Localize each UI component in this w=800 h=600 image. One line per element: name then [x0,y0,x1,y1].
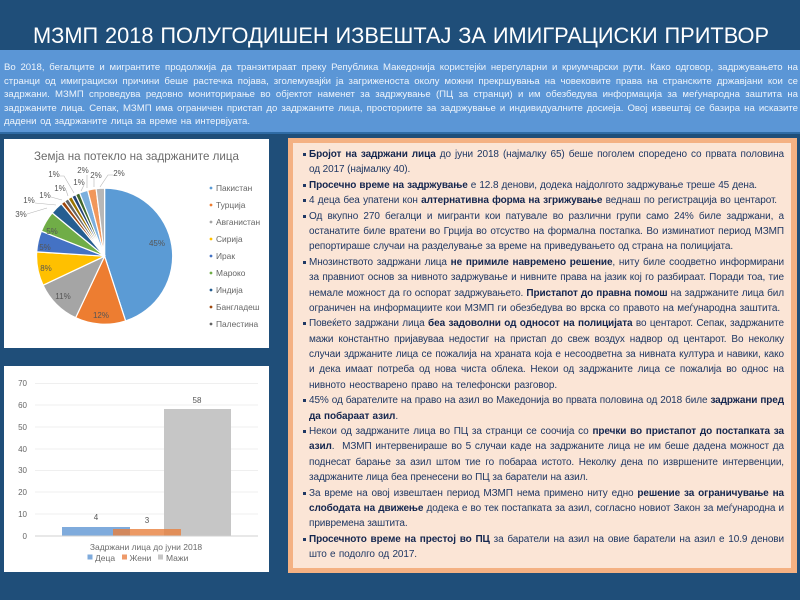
panel: peach background [293,143,791,568]
bar value labels: 4 [94,513,99,522]
finding: average stay in reception centre [293,532,791,563]
pie legend: Бангладеш [216,302,260,312]
pie percentage labels: 1% [73,178,85,187]
bar chart y-axis labels: 0 [23,532,28,541]
pie legend: Сирија [216,234,243,244]
pie percentage labels: 5% [46,227,58,236]
title: МЗМП 2018 ПОЛУГОДИШЕН ИЗВЕШТАЈ ЗА ИМИГРАЦИСКИ ПРИТВОР [33,23,769,48]
finding: 270 refugees and migrants [293,209,791,255]
finding: 45 percent of asylum seekers: 45% од барателите на право на азил во Македонија во првата половина од 2018 биле задржани пред [309,395,784,406]
finding: no timely decision: за правниот основ за нивното задржување и нивните права на јазик кој го разбираат. Поради тоа, тие [309,272,784,283]
intro text panel: задржаните лица. Сепак, МЗМП има ограничен пристап до задржаните лица, просториите за задржување и индивидуалните досиеја. Овој извештај се базира на исказите [4,103,798,114]
pie percentage labels: 1% [39,191,51,200]
pie percentage labels: 45% [149,239,165,248]
finding: relations with police: нивното неостварено право на телефонски разговор. [309,380,557,391]
finding: restriction of movement: слободата на движење додека е во тек постапката за азил, согласно новиот Закон за меѓународна и [309,503,784,514]
pie legend: Ирак [216,251,235,261]
bar legend: Жени [130,553,152,563]
pie percentage labels [15,166,165,320]
finding: obstacles to asylum procedure [293,424,791,486]
bar chart y-axis labels: 60 [18,401,28,410]
bar chart y-axis labels [18,379,28,541]
pie legend: Авганистан [216,217,260,227]
bars [62,409,231,536]
finding: alternative care: 4 деца беа упатени кон алтернативна форма на згрижување веднаш по регистрација во центарот. [309,195,777,206]
pie legend: Пакистан [216,183,253,193]
bar legend: Деца [95,553,115,563]
bar chart y-axis labels: 70 [18,379,28,388]
finding: relations with police: и дека имаат потреба од нова чиста облека. Некои од задржаните лица се пожалија во однос на [309,364,784,375]
pie percentage labels: 1% [23,196,35,205]
bar chart y-axis labels: 20 [18,488,28,497]
finding: obstacles to asylum procedure: азил. МЗМП интервенираше во 5 случаи каде на задржаните лица не им беше дадена можност да [309,441,784,452]
finding: number detained: Бројот на задржани лица до јуни 2018 (најмалку 65) беше поголем споредено со првата половина [309,149,784,160]
finding: restriction of movement [293,486,791,532]
finding: relations with police: случаи здржаните лица се пожалија на храната која е несоодветна за нивната култура и навики, како [309,349,784,360]
pie legend: Мароко [216,268,246,278]
bar chart y-axis labels: 10 [18,510,28,519]
bar chart y-axis labels: 30 [18,466,28,475]
finding: no timely decision [293,255,791,316]
bar chart y-axis labels: 40 [18,445,28,454]
pie percentage labels: 2% [113,169,125,178]
bar value labels: 58 [193,396,202,405]
pie percentage labels: 1% [54,184,66,193]
pie percentage labels: 8% [40,264,52,273]
pie percentage labels: 2% [90,171,102,180]
pie percentage labels: 2% [77,166,89,175]
pie percentage labels: 3% [15,210,27,219]
pie percentage labels: 5% [39,243,51,252]
intro text panel [0,50,800,134]
finding: no timely decision: Мнозинството задржани лица не примиле навремено решение, ниту биле соодветно информирани [309,257,784,268]
bar legend [88,553,189,563]
finding: 270 refugees and migrants: останатите биле вратени во Грција во отсуство на формална постапка. Во изминатиот период МЗМП [309,226,784,237]
axis title: Задржани лица до јуни 2018 [90,542,202,552]
pie percentage labels: 11% [55,292,71,301]
finding: 45 percent of asylum seekers [293,393,791,424]
finding: number detained: од 2017 (најмалку 40). [309,164,410,175]
pie legend [210,183,260,329]
pie leader lines [27,175,113,214]
intro text panel: задржани. МЗМП спроведува редовно мониторирање во објектот наменет за задржување (ПЦ за странци) и им обезбедува информација за меѓународна заштита на [4,89,798,100]
finding: obstacles to asylum procedure: задржаните лица беа пренесени во ПЦ за баратели на азил. [309,472,588,483]
finding: 270 refugees and migrants: репортираше случаи на разделување за време на приведувањето од страна на полицијата. [309,241,733,252]
intro text panel: Во 2018, бегалците и мигрантите продолжија да транзитираат преку Република Македонија користејќи нерегуларни и криумчарски рути. Како одговор, задржувањето на [4,62,798,73]
finding: number detained [293,147,791,178]
finding: obstacles to asylum procedure: Некои од задржаните лица во ПЦ за странци се соочија со пречки во пристапот до постапката за [309,426,784,437]
pie legend: Турција [216,200,246,210]
finding: restriction of movement: За време на овој извештаен период МЗМП нема примено ниту едно решение за ограничување на [309,488,784,499]
pie legend: Палестина [216,319,259,329]
panel: bar chart of detained persons [4,366,269,572]
intro text panel: странци од имиграциски причини беше растечка појава, зголемувајќи ја загриженоста околу можни прекршувања на човековите права на странските државјани кои се [4,76,798,87]
finding: average stay in reception centre: што е подолго од 2017. [309,549,417,560]
finding: obstacles to asylum procedure: поднесат барање за азил штом тие го побараа истото. Неколку дена по извршените интервенции, [309,457,784,468]
finding: no timely decision: ограничен на информациите кои МЗМП ги обезбедува во врска со правото на меѓународна заштита. [309,303,780,314]
pie slices [37,188,173,324]
finding: 270 refugees and migrants: Од вкупно 270 бегалци и мигранти кои патувале во различни групи само 24% биле задржани, а [309,211,784,222]
finding: 45 percent of asylum seekers: да побараат азил. [309,411,398,422]
intro text panel: дадени од задржаните лица за време на интервјуата. [4,116,250,127]
pie percentage labels: 1% [48,170,60,179]
finding: relations with police: Повеќето задржани лица беа задоволни од односот на полицијата во центарот. Сепак, задржаните [309,318,784,329]
finding: relations with police: мажи константно пријавуваа недостиг на пристап до свеж воздух надвор од центарот. Во неколку [309,334,784,345]
finding: restriction of movement: привремена заштита. [309,518,408,529]
finding: average detention time: Просечно време на задржување е 12.8 денови, додека најдолгото задржување треше 45 дена. [309,180,757,191]
finding: no timely decision: немале можност да го оспорат задржувањето. Пристапот до правна помош на задржаните лица бил [309,288,784,299]
finding: average stay in reception centre: Просечното време на престој во ПЦ за баратели на азил на овие баратели на азил е 10.9 денови [309,534,784,545]
bar chart y-axis labels: 50 [18,423,28,432]
panel: key findings list [303,149,784,560]
bar value labels [94,396,202,525]
pie percentage labels: 12% [93,311,109,320]
panel: pie chart of country of origin [4,139,269,348]
panel: orange frame [288,138,797,573]
pie legend: Индија [216,285,243,295]
pie chart title: Земја на потекло на задржаните лица [34,150,240,163]
bar value labels: 3 [145,516,150,525]
finding: relations with police [293,316,791,393]
bar legend: Мажи [166,553,189,563]
